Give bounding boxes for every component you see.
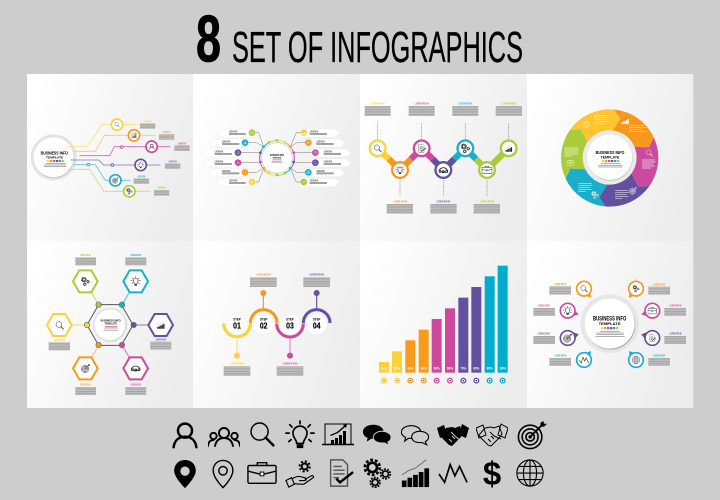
bar values: 100% xyxy=(499,367,506,371)
segment icons xyxy=(567,117,653,199)
step labels: 01 xyxy=(233,321,241,331)
bar values: 10% xyxy=(381,367,387,371)
text blocks: LOREM IPSUM xyxy=(256,275,271,277)
branch: green gears xyxy=(69,169,169,197)
text blocks xyxy=(224,275,330,376)
branch: orange chart: LOREM IPSUM xyxy=(163,132,171,134)
center ring: TEMPLATE xyxy=(273,157,282,160)
outer hexagon: yellow search xyxy=(47,314,72,350)
branch: yellow search xyxy=(67,119,155,147)
panel: four step wave xyxy=(193,241,360,408)
node: blue zigzag: LOREM IPSUM xyxy=(554,356,566,358)
center badge xyxy=(31,134,77,180)
panel background xyxy=(360,74,527,241)
step labels: 04 xyxy=(313,321,321,331)
outer hexagon: purple bars: LOREM IPSUM xyxy=(155,339,166,341)
center badge: TEMPLATE xyxy=(46,155,63,159)
branch: yellow search: LOREM IPSUM xyxy=(144,121,152,123)
bottom text blocks: LOREM IPSUM xyxy=(436,202,450,204)
center badge: TEMPLATE xyxy=(601,155,620,159)
outer hexagon: purple bars xyxy=(148,314,173,350)
step labels: STEP xyxy=(286,317,294,321)
top text blocks: LOREM IPSUM xyxy=(415,104,429,106)
branch: blue target: LOREM IPSUM xyxy=(137,176,145,178)
panel: bar chart xyxy=(360,241,527,408)
bar values: 80% xyxy=(473,367,479,371)
banner text: left xyxy=(215,132,246,184)
center hexagon xyxy=(87,305,133,345)
bar values: 30% xyxy=(407,367,413,371)
step labels: 03 xyxy=(286,321,294,331)
node: purple document xyxy=(641,331,686,345)
node: blue globe xyxy=(629,351,670,367)
bar values: 60% xyxy=(447,367,453,371)
bar values: 70% xyxy=(460,367,466,371)
center badge xyxy=(580,294,639,353)
outer hexagon: magenta handshake: LOREM IPSUM xyxy=(130,385,141,387)
wave arcs xyxy=(224,310,330,337)
banners xyxy=(202,129,351,187)
dashed connectors xyxy=(378,122,509,197)
center hexagon: TEMPLATE xyxy=(104,323,117,326)
panel background xyxy=(527,241,693,408)
connectors xyxy=(72,292,148,358)
node: orange search xyxy=(549,281,591,298)
branch: purple bulb xyxy=(70,159,180,171)
text blocks: LOREM IPSUM xyxy=(309,275,324,277)
icon row: bottom: $ xyxy=(483,455,501,492)
outer hexagon: orange target xyxy=(73,357,98,395)
banner text: left: LOREM IPSUM xyxy=(215,151,223,153)
wave ribbon xyxy=(378,148,509,170)
center badge: BUSINESS INFO xyxy=(41,150,68,155)
outer hexagon: green gears xyxy=(73,255,98,292)
center ring xyxy=(253,134,301,182)
branch: magenta person: LOREM IPSUM xyxy=(178,143,186,145)
bar values: 90% xyxy=(487,367,493,371)
node: magenta bulb: LOREM IPSUM xyxy=(538,306,550,308)
banner text: right: LOREM IPSUM xyxy=(316,142,325,144)
node: orange gears: LOREM IPSUM xyxy=(653,284,665,286)
banner text: right xyxy=(310,132,341,184)
outer hexagon: orange target: LOREM IPSUM xyxy=(80,385,91,387)
center hexagon: BUSINESS INFO xyxy=(101,319,121,323)
center badge: BUSINESS INFO xyxy=(596,150,625,155)
outer hexagon: magenta handshake xyxy=(123,357,148,395)
icon row: top xyxy=(174,421,547,449)
step labels: STEP xyxy=(313,317,321,321)
panel: radial twelve-banner diagram xyxy=(193,74,360,241)
bar values: 50% xyxy=(434,367,440,371)
step labels xyxy=(233,317,321,331)
center badge xyxy=(583,130,637,184)
panel background xyxy=(27,241,193,408)
panel: hub with speech-bubble nodes xyxy=(527,241,693,408)
node: magenta case xyxy=(641,303,686,318)
banner text: left: LOREM IPSUM xyxy=(222,171,230,173)
title xyxy=(196,2,523,76)
cycle segments xyxy=(546,96,674,220)
step nodes with icons xyxy=(369,139,518,179)
stems and dots xyxy=(234,290,320,359)
banner text: right: LOREM IPSUM xyxy=(310,132,318,134)
vertex nodes xyxy=(84,302,136,348)
node: purple document: LOREM IPSUM xyxy=(669,334,681,336)
top text blocks: LOREM IPSUM xyxy=(502,104,516,106)
outer hexagon: green gears: LOREM IPSUM xyxy=(80,255,91,257)
icon dots xyxy=(381,378,506,384)
top text blocks: LOREM IPSUM xyxy=(458,104,472,106)
banner text: right: LOREM IPSUM xyxy=(324,161,332,163)
step labels: 02 xyxy=(260,321,268,331)
top text blocks: LOREM IPSUM xyxy=(371,104,385,106)
bar values: 20% xyxy=(394,367,400,371)
segment text lines xyxy=(565,116,655,199)
banner text: left: LOREM IPSUM xyxy=(215,161,223,163)
panel: wave timeline xyxy=(360,74,527,241)
step circles xyxy=(227,314,327,335)
node: orange search: LOREM IPSUM xyxy=(554,284,566,286)
outer hexagon: blue bulb: LOREM IPSUM xyxy=(130,255,141,257)
text blocks: LOREM IPSUM xyxy=(230,363,244,365)
bottom text blocks xyxy=(387,202,500,214)
bar values: 40% xyxy=(421,367,427,371)
banner text: right: LOREM IPSUM xyxy=(310,181,318,183)
text blocks: LOREM IPSUM xyxy=(283,363,297,365)
bottom text blocks: LOREM IPSUM xyxy=(393,202,407,204)
panel background xyxy=(360,241,527,408)
center badge: BUSINESS INFO xyxy=(593,315,626,322)
node: purple target xyxy=(533,331,579,345)
icon row: bottom xyxy=(174,455,543,492)
banner text: left: LOREM IPSUM xyxy=(222,142,230,144)
branch: magenta person xyxy=(79,141,190,156)
branch: blue target xyxy=(74,163,149,186)
node: blue zigzag xyxy=(549,351,591,367)
step labels: STEP xyxy=(233,317,241,321)
panel: branching timeline xyxy=(27,74,193,241)
panel: circular arrow cycle xyxy=(527,74,693,241)
branch: green gears: LOREM IPSUM xyxy=(158,188,166,190)
title: 8 xyxy=(196,2,221,76)
node: purple target: LOREM IPSUM xyxy=(538,334,550,336)
center ring: BUSINESS INFO xyxy=(270,153,284,157)
left nodes xyxy=(235,129,255,185)
connectors xyxy=(241,133,312,182)
bar values xyxy=(381,367,506,371)
panel background xyxy=(193,241,360,408)
banner text: right: LOREM IPSUM xyxy=(316,171,325,173)
node: blue globe: LOREM IPSUM xyxy=(653,356,665,358)
banner text: right: LOREM IPSUM xyxy=(324,151,332,153)
top text blocks xyxy=(365,104,522,116)
outer hexagon: yellow search: LOREM IPSUM xyxy=(54,340,65,342)
step labels: STEP xyxy=(260,317,268,321)
branch: purple bulb: LOREM IPSUM xyxy=(169,161,177,163)
banner text: left: LOREM IPSUM xyxy=(229,181,237,183)
banner text: left: LOREM IPSUM xyxy=(229,132,237,134)
branch: orange chart xyxy=(74,130,174,151)
node: magenta bulb xyxy=(533,303,579,318)
right nodes xyxy=(300,129,319,185)
center badge: TEMPLATE xyxy=(599,321,621,326)
bars xyxy=(379,266,508,373)
panel background xyxy=(527,74,693,241)
bottom text blocks: LOREM IPSUM xyxy=(480,202,494,204)
outer hexagon: blue bulb xyxy=(123,255,148,292)
panel: hexagon diagram xyxy=(27,241,193,408)
node: orange gears xyxy=(629,281,670,298)
panel background xyxy=(193,74,360,241)
node: magenta case: LOREM IPSUM xyxy=(669,306,681,308)
panel background xyxy=(27,74,193,241)
